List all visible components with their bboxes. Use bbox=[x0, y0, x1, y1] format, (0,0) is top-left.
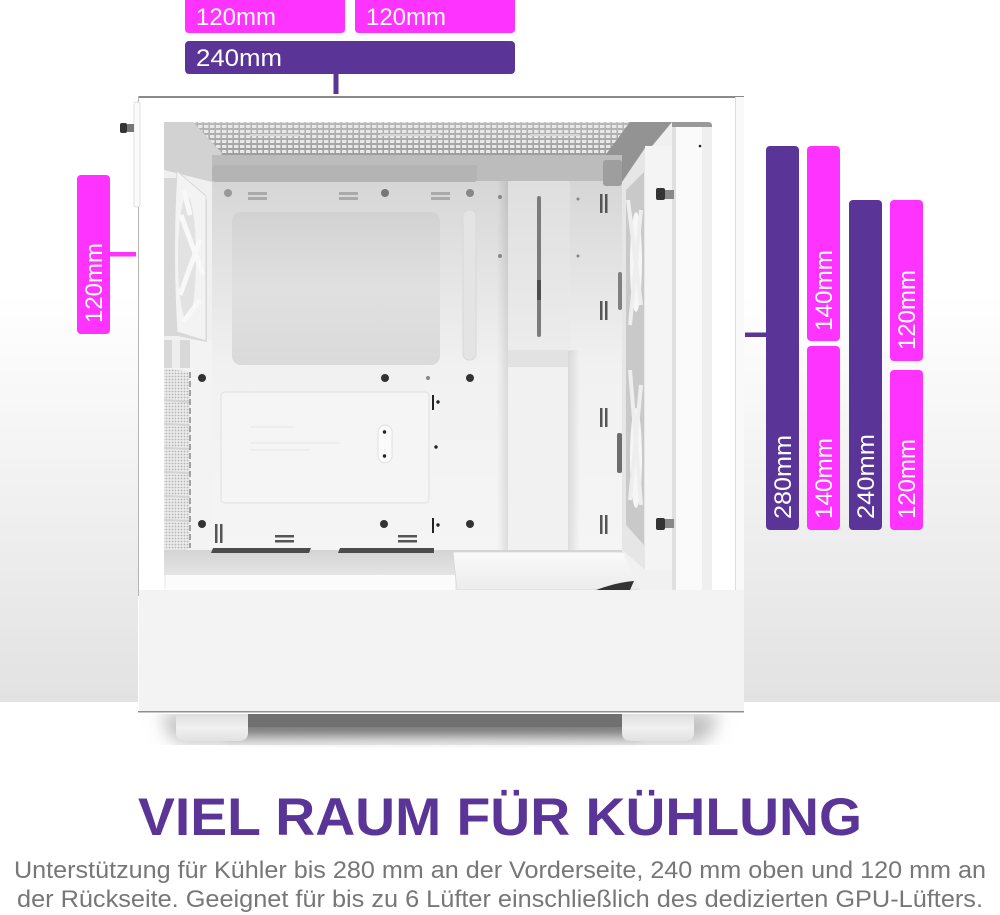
right size label: 120mm upper bbox=[890, 200, 923, 361]
description text bbox=[14, 857, 986, 913]
top size label: 240mm bbox=[185, 41, 515, 74]
side window interior bbox=[164, 122, 712, 590]
front fan bracket bbox=[617, 146, 675, 590]
left size label: 120mm bbox=[77, 175, 110, 334]
floor shadow bbox=[160, 713, 720, 744]
description text: Unterstützung für Kühler bis 280 mm an der Vorderseite, 240 mm oben und 120 mm an bbox=[14, 857, 986, 884]
title: VIEL RAUM FÜR KÜHLUNG bbox=[138, 788, 862, 847]
bottom shroud bbox=[139, 590, 744, 711]
connector: right bbox=[745, 332, 767, 337]
right size label: 140mm lower: 140mm bbox=[811, 438, 838, 519]
motherboard tray bbox=[212, 181, 622, 550]
left size label: 120mm: 120mm bbox=[81, 243, 108, 323]
bottom fan bay bbox=[453, 552, 660, 590]
rear handle and thumbscrew bbox=[120, 102, 140, 207]
slim vertical slot outline bbox=[463, 210, 476, 360]
top size label: 120mm right bbox=[355, 0, 515, 33]
top size label: 120mm left bbox=[185, 0, 345, 33]
background gradient band bbox=[0, 0, 1000, 702]
case body bbox=[138, 96, 744, 713]
description text: der Rückseite. Geeignet für bis zu 6 Lüfter einschließlich des dedizierten GPU-Lüfters. bbox=[17, 886, 983, 913]
cable slots bbox=[248, 192, 450, 200]
right size label: 240mm bbox=[849, 200, 882, 530]
top size label: 120mm right: 120mm bbox=[366, 4, 446, 31]
tray cutout bbox=[232, 212, 440, 365]
connector: top bbox=[334, 74, 338, 94]
top size label: 120mm left: 120mm bbox=[196, 4, 276, 31]
thumbscrews bbox=[656, 188, 674, 530]
right side mount holes bbox=[432, 395, 440, 533]
ceiling perforation bbox=[164, 122, 672, 182]
PSU shroud vents bbox=[164, 548, 622, 590]
right size label: 120mm lower bbox=[890, 370, 923, 530]
right size label: 140mm upper bbox=[807, 146, 840, 341]
PC case bbox=[120, 96, 744, 744]
standoffs bbox=[198, 189, 580, 528]
GPU bracket column bbox=[497, 181, 580, 550]
connector: left bbox=[110, 252, 136, 256]
rear IO mesh bbox=[164, 340, 190, 561]
right size label: 140mm upper: 140mm bbox=[811, 250, 838, 331]
right size label: 140mm lower bbox=[807, 346, 840, 530]
right size label: 120mm lower: 120mm bbox=[894, 439, 921, 519]
right size label: 120mm upper: 120mm bbox=[894, 270, 921, 350]
front panel strip bbox=[672, 122, 712, 590]
motherboard back plate bbox=[221, 392, 429, 503]
rear fan bbox=[164, 171, 207, 342]
right size label: 280mm bbox=[766, 146, 799, 530]
right size label: 280mm: 280mm bbox=[770, 435, 797, 519]
right foot bbox=[622, 714, 694, 741]
left foot bbox=[176, 714, 248, 741]
right size label: 240mm: 240mm bbox=[853, 434, 880, 519]
top size label: 240mm: 240mm bbox=[196, 45, 282, 72]
